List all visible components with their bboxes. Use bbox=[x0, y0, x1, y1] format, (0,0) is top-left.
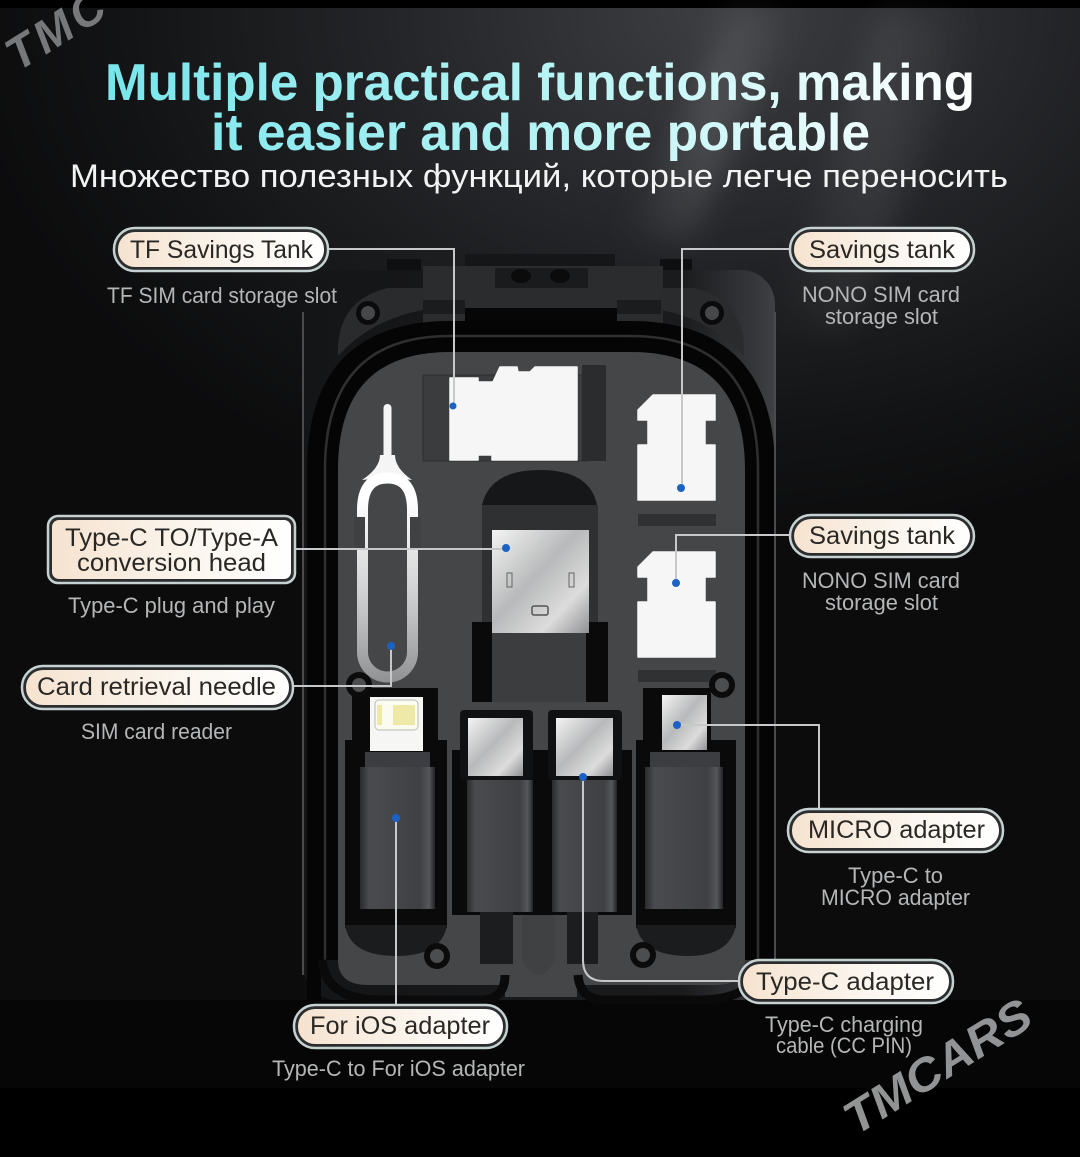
caption: NONO SIM card storage slot 1 bbox=[802, 282, 960, 329]
caption: NONO SIM card storage slot 2: storage slot bbox=[825, 590, 938, 615]
label: Type-C TO/Type-A conversion head bbox=[48, 516, 295, 583]
rubber band bbox=[314, 328, 768, 1000]
label: Type-C adapter: Type-C adapter bbox=[756, 968, 934, 996]
caption: TF SIM card storage slot: TF SIM card storage slot bbox=[107, 283, 337, 308]
label: MICRO adapter bbox=[788, 809, 1003, 852]
caption: Type-C to For iOS adapter: Type-C to For iOS adapter bbox=[272, 1056, 525, 1081]
caption: SIM card reader: SIM card reader bbox=[81, 719, 232, 744]
caption: Type-C charging cable (CC PIN): cable (CC PIN) bbox=[776, 1033, 912, 1058]
screws bbox=[346, 301, 735, 969]
case edge highlights bbox=[302, 312, 304, 975]
label: Savings tank 2 bbox=[790, 515, 974, 557]
label: TF Savings Tank: TF Savings Tank bbox=[130, 236, 313, 264]
label: Type-C adapter bbox=[739, 960, 953, 1003]
label: MICRO adapter: MICRO adapter bbox=[808, 816, 985, 844]
TF card bbox=[423, 365, 606, 461]
lightning adapter bbox=[345, 688, 447, 956]
caption: NONO SIM card storage slot 1: NONO SIM card bbox=[802, 282, 960, 307]
label: Type-C TO/Type-A conversion head: Type-C TO/Type-A bbox=[65, 524, 278, 552]
caption: NONO SIM card storage slot 1: storage slot bbox=[825, 304, 938, 329]
callout dots bbox=[387, 402, 685, 822]
caption: Type-C charging cable (CC PIN) bbox=[765, 1012, 923, 1058]
caption: NONO SIM card storage slot 2 bbox=[802, 568, 960, 615]
caption: Type-C to MICRO adapter bbox=[821, 863, 970, 910]
label: For iOS adapter bbox=[294, 1005, 507, 1048]
type-C adapter left bbox=[452, 710, 632, 964]
label: Savings tank 2: Savings tank bbox=[809, 522, 956, 550]
caption: NONO SIM card storage slot 2: NONO SIM card bbox=[802, 568, 960, 593]
caption: Type-C to MICRO adapter: Type-C to bbox=[848, 863, 943, 888]
label: Type-C TO/Type-A conversion head: conversion head bbox=[77, 549, 266, 577]
needle bbox=[354, 408, 421, 677]
label: Card retrieval needle bbox=[22, 666, 293, 709]
micro adapter bbox=[636, 688, 736, 956]
title: it easier and more portable bbox=[211, 104, 870, 162]
SIM card 1 bbox=[638, 395, 716, 526]
SIM card 2 bbox=[638, 552, 716, 682]
hinge top bbox=[303, 254, 775, 1000]
label: Savings tank 1: Savings tank bbox=[809, 236, 956, 264]
USB conversion head bbox=[472, 470, 608, 702]
title bbox=[105, 54, 975, 162]
tray bbox=[338, 352, 745, 985]
callout lines bbox=[293, 249, 819, 1005]
title: Multiple practical functions, making bbox=[105, 54, 975, 112]
subtitle: Множество полезных функций, которые легче переносить bbox=[70, 158, 1008, 194]
label: TF Savings Tank bbox=[114, 228, 328, 271]
label: Card retrieval needle: Card retrieval needle bbox=[37, 673, 276, 701]
shoulder tabs bbox=[338, 288, 423, 356]
device case bbox=[303, 254, 775, 1000]
watermark: bottom right: TMCARS bbox=[834, 988, 1041, 1144]
label: Savings tank 1 bbox=[790, 228, 974, 271]
caption: Type-C plug and play: Type-C plug and play bbox=[68, 593, 275, 618]
label: For iOS adapter: For iOS adapter bbox=[310, 1012, 490, 1040]
caption: Type-C charging cable (CC PIN): Type-C charging bbox=[765, 1012, 923, 1037]
type-C adapter right bbox=[522, 710, 622, 975]
caption: Type-C to MICRO adapter: MICRO adapter bbox=[821, 885, 970, 910]
